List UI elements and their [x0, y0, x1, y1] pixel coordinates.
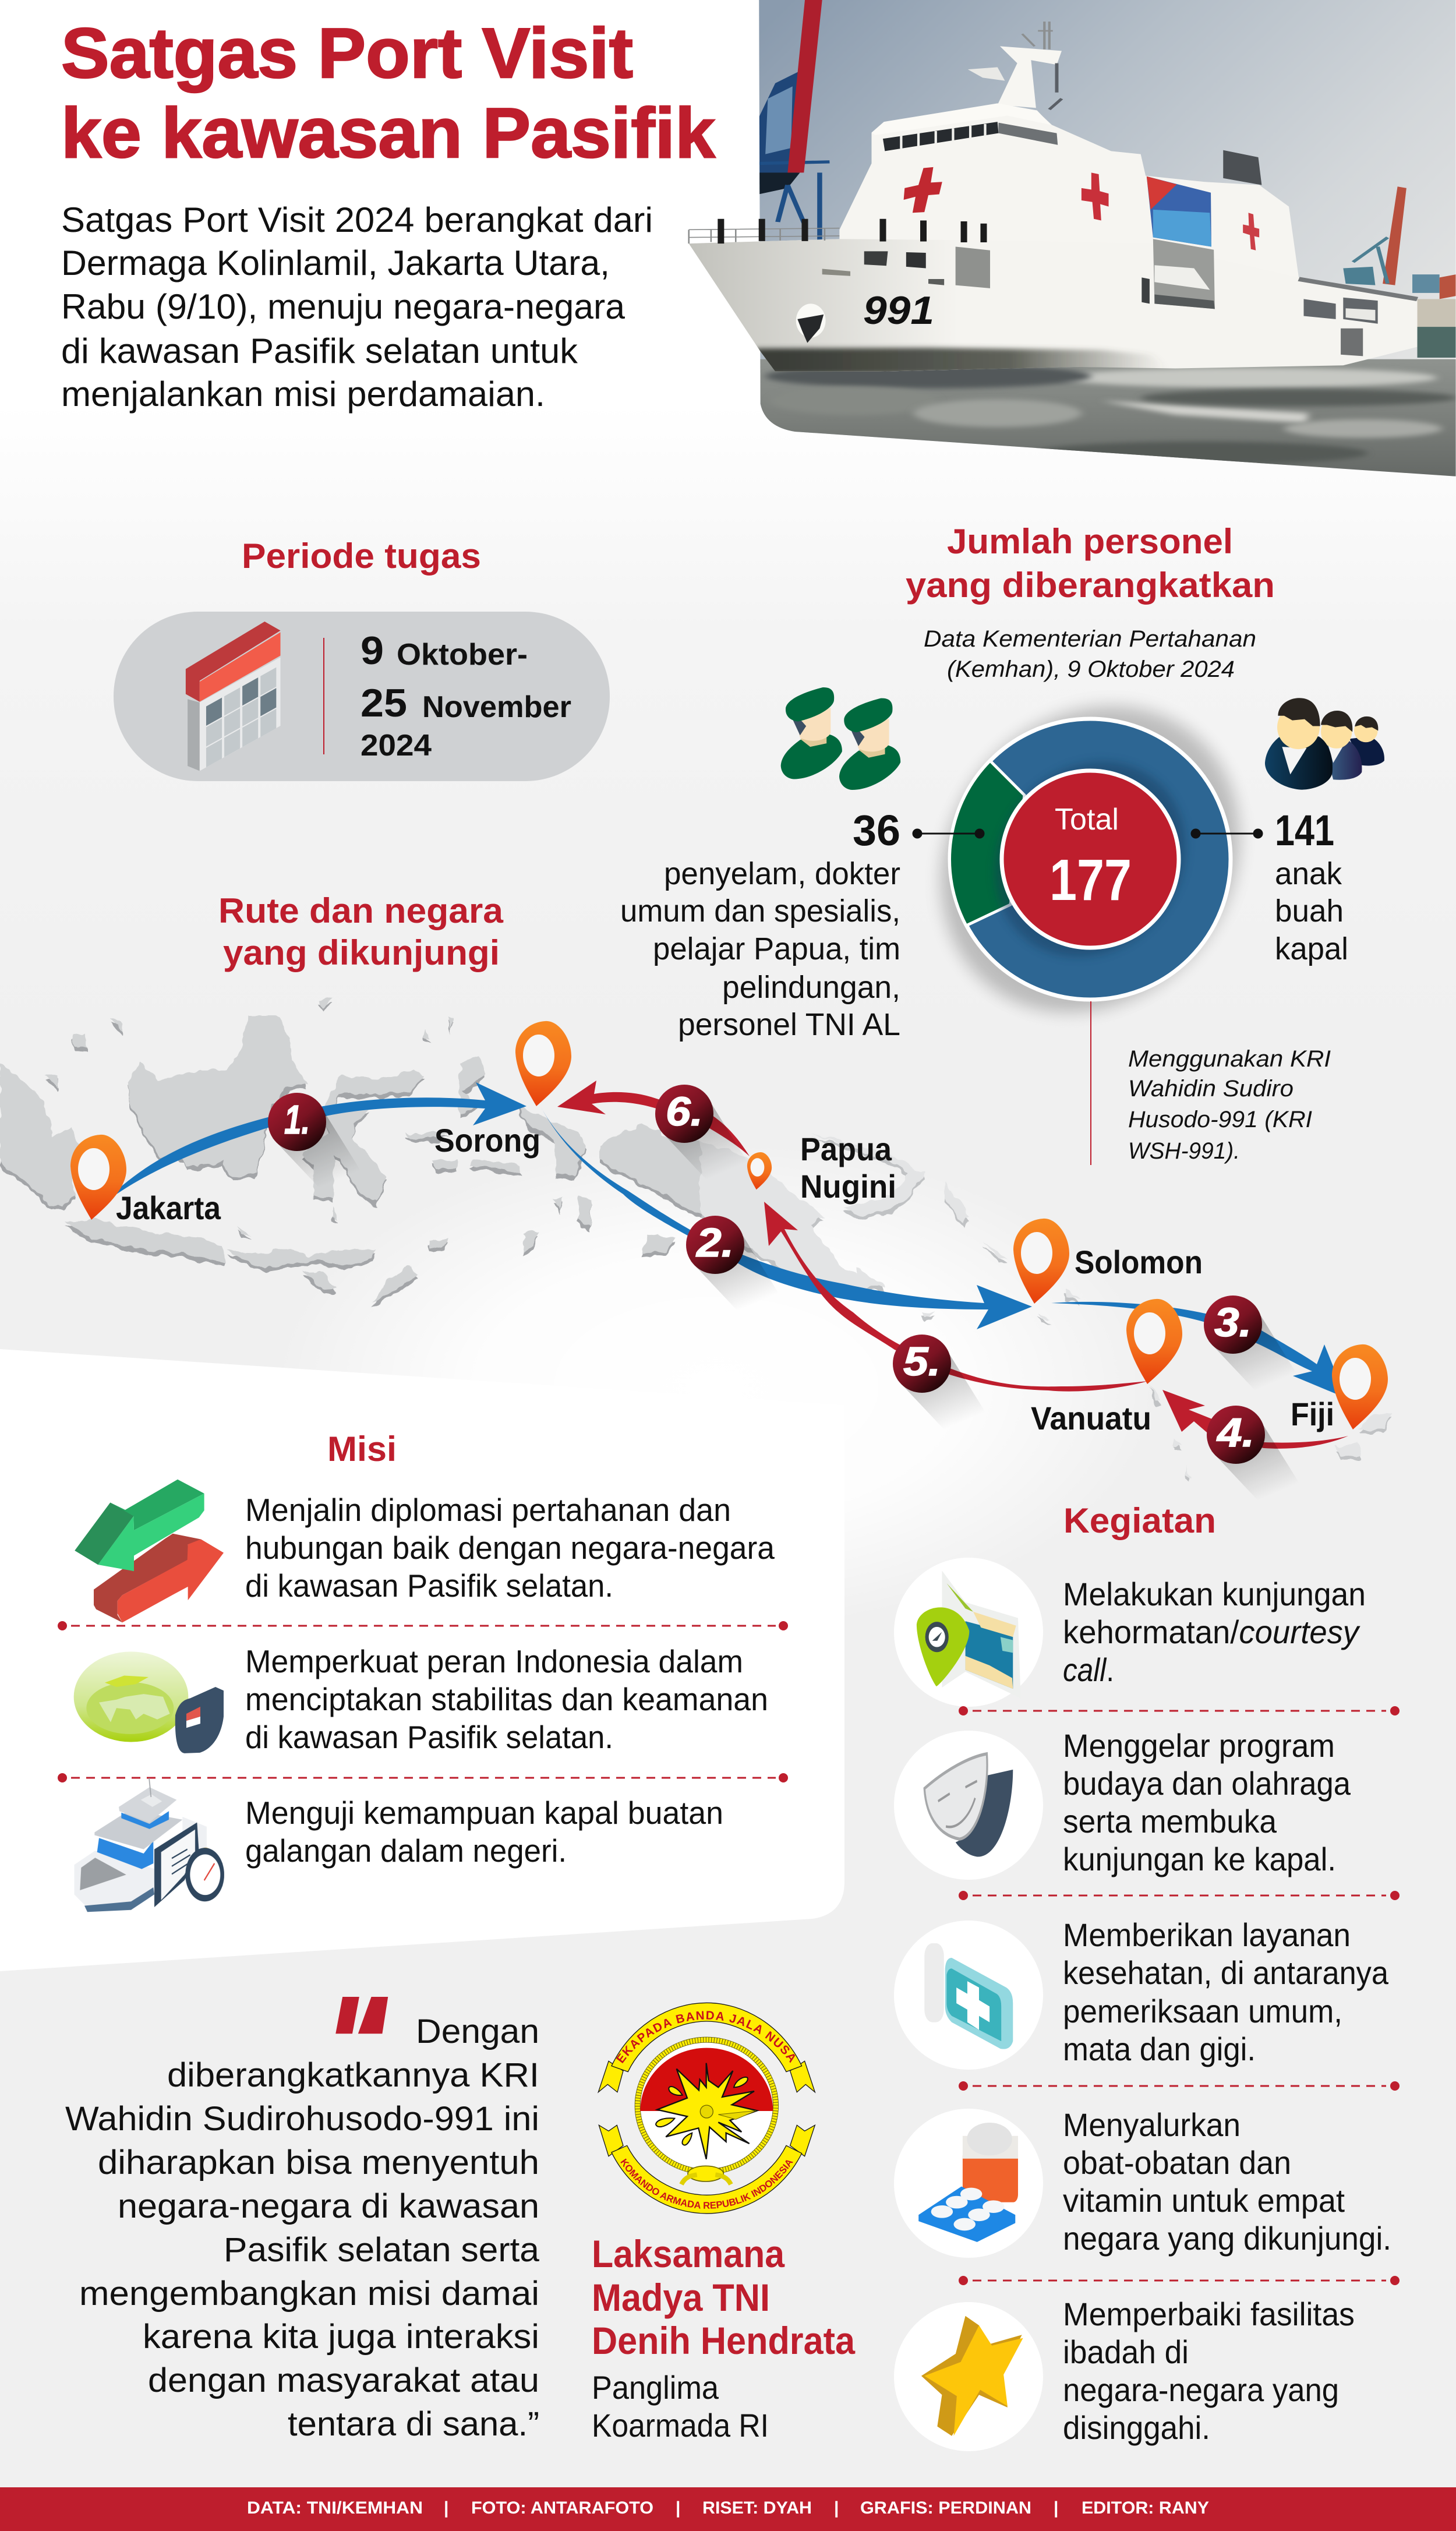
- hull openings: [864, 251, 888, 266]
- intro paragraph: Satgas Port Visit 2024 berangkat dari: [61, 200, 653, 239]
- label: 141 anak buah kapal: [1275, 806, 1348, 966]
- quote text: Pasifik selatan serta: [224, 2231, 540, 2269]
- text: kegiatan 5: ibadah di: [1063, 2334, 1189, 2370]
- pin: Vanuatu: [1126, 1299, 1182, 1384]
- label: 36 personel: umum dan spesialis,: [620, 894, 900, 929]
- icon: ship and checklist: [74, 1778, 224, 1912]
- icon backgrounds: [894, 1558, 1043, 2451]
- footer credits: |: [676, 2498, 680, 2518]
- text: kegiatan 3: mata dan gigi.: [1063, 2031, 1256, 2067]
- text: kegiatan 1: kehormatan/courtesy: [1063, 1614, 1360, 1650]
- icon: medical sign: [924, 1943, 1013, 2049]
- logo: Koarmada RI: [598, 2003, 816, 2214]
- label: 36 personel: personel TNI AL: [678, 1007, 900, 1042]
- place labels: Papua: [800, 1131, 892, 1167]
- icon: ship crew: [1265, 698, 1384, 790]
- text: misi 1: di kawasan Pasifik selatan.: [245, 1568, 613, 1604]
- icon: map and pin: [917, 1570, 1021, 1699]
- route 3 blue: [1051, 1302, 1346, 1398]
- hull number: 991: [863, 288, 934, 333]
- speaker name: Denih Hendrata: [592, 2319, 856, 2362]
- text: kegiatan 1: Melakukan kunjungan: [1063, 1576, 1366, 1612]
- quote text: dengan masyarakat atau: [148, 2361, 539, 2399]
- label: 141 anak buah kapal: 141: [1275, 806, 1334, 855]
- marker 4: [1207, 1406, 1300, 1502]
- marker 2: [686, 1216, 779, 1312]
- speaker role: Koarmada RI: [592, 2407, 769, 2444]
- icon: exchange arrows: [75, 1480, 224, 1622]
- icon: calendar: [186, 622, 281, 771]
- text: kegiatan 4: obat-obatan dan: [1063, 2144, 1291, 2181]
- total circle: [1002, 771, 1179, 948]
- text: kegiatan 3: Memberikan layanan: [1063, 1916, 1351, 1953]
- marker 1: 1.: [284, 1097, 310, 1142]
- data source note: [924, 626, 1256, 682]
- text: kegiatan 2: [1063, 1727, 1351, 1877]
- funnel: [1223, 150, 1261, 185]
- title: [61, 13, 715, 172]
- place labels: Jakarta: [116, 1189, 221, 1226]
- heading: jumlah personel: [906, 522, 1275, 605]
- chart: donut total personel: [879, 645, 1302, 1073]
- quote text: mengembangkan misi damai: [79, 2275, 539, 2313]
- logo: Koarmada RI: KOMANDO ARMADA REPUBLIK INDONESIA: [620, 2159, 793, 2209]
- pin: Fiji: [1332, 1344, 1388, 1429]
- icon: globe and shield: [74, 1651, 224, 1753]
- note: KRI WSH-991: [1128, 1046, 1331, 1164]
- speaker name: Laksamana: [592, 2232, 785, 2275]
- text: kegiatan 1: call.: [1063, 1651, 1114, 1688]
- text: kegiatan 5: disinggahi.: [1063, 2409, 1210, 2446]
- date text: 2024: [361, 729, 432, 763]
- text: kegiatan 4: [1063, 2106, 1391, 2257]
- mast: [1022, 22, 1053, 50]
- footer credits: DATA: TNI/KEMHAN: [247, 2498, 423, 2518]
- label: 141 anak buah kapal: anak: [1275, 856, 1342, 891]
- icon: medicine: [918, 2123, 1018, 2242]
- text: kegiatan 4: negara yang dikunjungi.: [1063, 2220, 1391, 2257]
- text: kegiatan 4: vitamin untuk empat: [1063, 2182, 1345, 2219]
- footer credits: GRAFIS: PERDINAN: [860, 2498, 1031, 2518]
- text: misi 2: menciptakan stabilitas dan keamanan: [245, 1681, 768, 1717]
- title: ke kawasan Pasifik: [61, 93, 715, 172]
- marker 1: [268, 1093, 361, 1189]
- icon: masks: [924, 1754, 1013, 1857]
- pin: Sorong: [515, 1021, 571, 1106]
- title: Satgas Port Visit: [61, 13, 633, 93]
- text: misi 2: Memperkuat peran Indonesia dalam: [245, 1643, 743, 1679]
- quote text: diberangkatkannya KRI: [167, 2056, 539, 2094]
- label: 36 personel: pelajar Papua, tim: [653, 931, 900, 966]
- note: KRI WSH-991: Menggunakan KRI: [1128, 1046, 1331, 1072]
- map: route: [0, 999, 1389, 1502]
- quote text: [65, 2013, 540, 2443]
- marker 6: [655, 1085, 748, 1181]
- note: KRI WSH-991: Wahidin Sudiro: [1128, 1076, 1294, 1102]
- text: kegiatan 2: serta membuka: [1063, 1803, 1277, 1840]
- text: kegiatan 5: Memperbaiki fasilitas: [1063, 2296, 1355, 2332]
- label: 36 personel: penyelam, dokter: [664, 856, 900, 891]
- quote text: tentara di sana.”: [288, 2405, 539, 2443]
- connector lines: [913, 829, 1262, 838]
- quote text: diharapkan bisa menyentuh: [98, 2144, 539, 2181]
- hull: [681, 234, 1422, 376]
- note: KRI WSH-991: WSH-991).: [1128, 1138, 1240, 1164]
- total circle: 177: [1049, 848, 1132, 913]
- text: misi 2: di kawasan Pasifik selatan.: [245, 1719, 613, 1755]
- route 5 red: [764, 1202, 1148, 1392]
- footer credits: |: [1054, 2498, 1058, 2518]
- red crosses: [904, 167, 942, 213]
- footer credits: |: [444, 2498, 448, 2518]
- pin: Solomon: [1013, 1219, 1069, 1304]
- cranes behind ship: [759, 71, 800, 194]
- date text: 25: [361, 681, 407, 725]
- heading: rute: [218, 891, 504, 972]
- boat bay: [1153, 239, 1215, 309]
- label: 141 anak buah kapal: kapal: [1275, 931, 1348, 966]
- place labels: Sorong: [434, 1122, 540, 1159]
- date text: November: [422, 690, 571, 724]
- intro paragraph: Rabu (9/10), menuju negara-negara: [61, 287, 625, 326]
- text: kegiatan 2: budaya dan olahraga: [1063, 1765, 1351, 1802]
- speaker role: [592, 2369, 769, 2444]
- label: 36 personel: 36: [853, 806, 900, 855]
- heading: periode tugas: Periode tugas: [242, 536, 481, 576]
- text: misi 1: Menjalin diplomasi pertahanan dan: [245, 1492, 731, 1528]
- data source note: Data Kementerian Pertahanan: [924, 626, 1256, 652]
- label: 141 anak buah kapal: buah: [1275, 894, 1344, 929]
- panel: date pill: [114, 612, 610, 781]
- data source note: (Kemhan), 9 Oktober 2024: [947, 656, 1235, 682]
- marker 3: 3.: [1214, 1300, 1252, 1345]
- speaker name: [592, 2232, 856, 2362]
- heading: jumlah personel: Jumlah personel: [947, 522, 1233, 561]
- text: misi 1: hubungan baik dengan negara-negara: [245, 1530, 775, 1566]
- banner: [1147, 177, 1211, 246]
- heading: misi: Misi: [327, 1429, 397, 1469]
- speaker role: Panglima: [592, 2369, 719, 2406]
- place labels: Vanuatu: [1031, 1400, 1151, 1436]
- place labels: Solomon: [1075, 1244, 1203, 1280]
- text: kegiatan 3: kesehatan, di antaranya: [1063, 1954, 1389, 1991]
- superstructure: [839, 111, 1418, 339]
- marker 2: 2.: [695, 1220, 734, 1265]
- route 2 blue: [540, 1106, 1032, 1329]
- pin: Papua Nugini: [747, 1152, 772, 1189]
- label: 36 personel: pelindungan,: [722, 970, 900, 1005]
- heading: kegiatan: Kegiatan: [1063, 1501, 1216, 1540]
- land masses: [0, 999, 1389, 1481]
- text: kegiatan 5: negara-negara yang: [1063, 2371, 1339, 2408]
- text: misi 3: Menguji kemampuan kapal buatan: [245, 1795, 723, 1831]
- footer credits: EDITOR: RANY: [1082, 2498, 1209, 2518]
- place labels: [116, 1122, 1334, 1436]
- text: kegiatan 3: [1063, 1916, 1389, 2067]
- intro paragraph: [61, 200, 653, 414]
- text: kegiatan 4: Menyalurkan: [1063, 2106, 1241, 2143]
- intro paragraph: di kawasan Pasifik selatan untuk: [61, 331, 578, 370]
- text: kegiatan 2: kunjungan ke kapal.: [1063, 1841, 1336, 1877]
- quote text: Dengan: [416, 2013, 539, 2050]
- icon: quotation mark: [335, 1997, 388, 2034]
- text: misi 2: [245, 1643, 768, 1755]
- railing and crew: [689, 228, 839, 243]
- quote text: negara-negara di kawasan: [118, 2187, 539, 2225]
- text: kegiatan 2: Menggelar program: [1063, 1727, 1335, 1764]
- icon: soldiers: [781, 687, 900, 790]
- intro paragraph: Dermaga Kolinlamil, Jakarta Utara,: [61, 243, 610, 283]
- text: kegiatan 5: [1063, 2296, 1355, 2446]
- intro paragraph: menjalankan misi perdamaian.: [61, 375, 545, 414]
- marker 3: [1204, 1295, 1297, 1392]
- pin: Jakarta: [70, 1135, 126, 1220]
- route 1 blue: [101, 1082, 526, 1205]
- text: misi 1: [245, 1492, 775, 1604]
- segment: 36 personel: [950, 761, 1024, 926]
- marker 4: 4.: [1216, 1410, 1254, 1455]
- text: kegiatan 3: pemeriksaan umum,: [1063, 1993, 1342, 2029]
- date text: [361, 629, 571, 763]
- text: misi 3: [245, 1795, 723, 1869]
- logo: Koarmada RI: EKAPADA BANDA JALA NUSA: [616, 2011, 796, 2063]
- speaker name: Madya TNI: [592, 2276, 770, 2319]
- note: KRI WSH-991: Husodo-991 (KRI: [1128, 1107, 1312, 1132]
- date text: 9: [361, 629, 384, 673]
- place labels: Nugini: [800, 1168, 896, 1205]
- heading: rute: Rute dan negara: [218, 891, 504, 930]
- route 6 red: [557, 1081, 750, 1156]
- heading: rute: yang dikunjungi: [223, 933, 500, 972]
- panel: kegiatan items: [894, 1558, 1400, 2451]
- footer credits: RISET: DYAH: [702, 2498, 812, 2518]
- photo: hospital ship KRI WSH-991: [681, 0, 1456, 481]
- footer credits: [0, 2487, 1456, 2531]
- marker 5: [893, 1335, 986, 1431]
- anchor: [796, 303, 826, 338]
- label: 36 personel: [620, 806, 900, 1042]
- footer credits: |: [834, 2498, 839, 2518]
- quote text: Wahidin Sudirohusodo-991 ini: [65, 2100, 539, 2138]
- icon: star: [921, 2316, 1023, 2436]
- heading: jumlah personel: yang diberangkatkan: [906, 566, 1275, 605]
- quote: [65, 1997, 540, 2443]
- footer credits: FOTO: ANTARAFOTO: [471, 2498, 653, 2518]
- marker 6: 6.: [666, 1089, 703, 1134]
- place labels: Fiji: [1291, 1396, 1334, 1432]
- date text: Oktober-: [397, 638, 528, 672]
- total circle: Total: [1055, 803, 1119, 836]
- panel: misi items: [58, 1480, 788, 1912]
- marker 5: 5.: [903, 1339, 941, 1384]
- text: misi 3: galangan dalam negeri.: [245, 1833, 567, 1869]
- route 4 red: [1162, 1390, 1348, 1449]
- text: kegiatan 1: [1063, 1576, 1366, 1688]
- quote text: karena kita juga interaksi: [143, 2318, 539, 2356]
